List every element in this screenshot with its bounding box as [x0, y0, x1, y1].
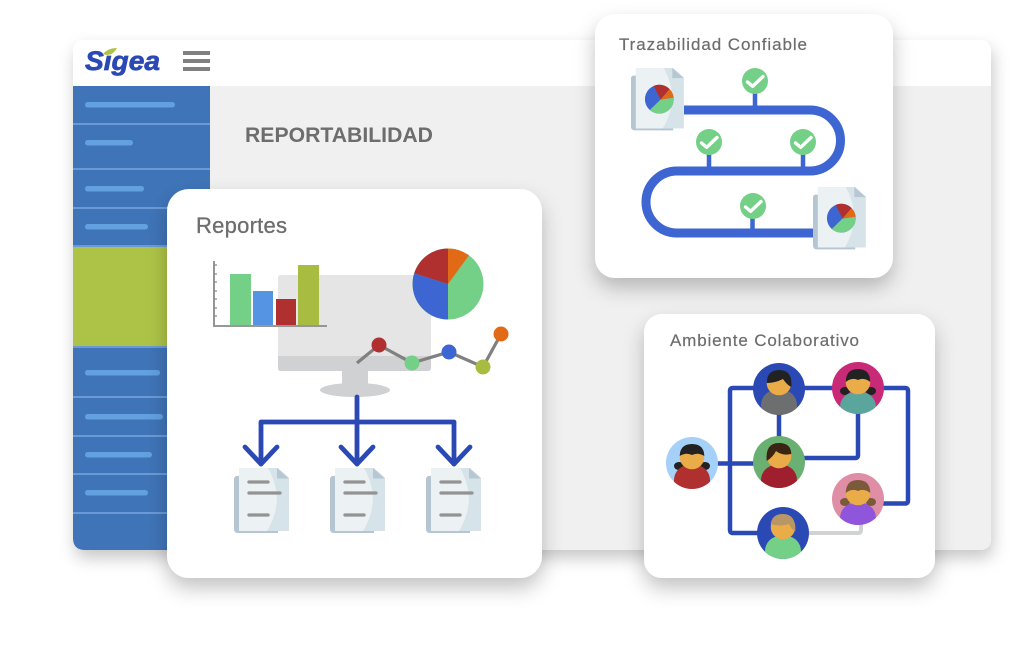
person: bottom [757, 507, 809, 559]
heading: REPORTABILIDAD: REPORTABILIDAD [245, 124, 433, 147]
heading: Ambiente Colaborativo: Ambiente Colaborativo [670, 331, 859, 350]
sidebar [73, 86, 210, 550]
panel: Ambiente Colaborativo [644, 314, 935, 578]
pie chart [412, 248, 484, 320]
network connectors [692, 388, 908, 533]
icon: report document start [631, 68, 684, 130]
icon: report document end [813, 187, 866, 249]
icon: document 3 [426, 468, 481, 533]
icon: document 1 [234, 468, 289, 533]
person: top right [832, 362, 884, 414]
panel: Reportes [167, 189, 542, 578]
arrows to documents [245, 397, 470, 464]
icon: hamburger menu [183, 51, 210, 71]
person: lower right [832, 473, 884, 525]
logo: Sigea: Sigea [85, 46, 160, 76]
panel: Trazabilidad Confiable [595, 14, 893, 278]
heading: Trazabilidad Confiable: Trazabilidad Confiable [619, 35, 807, 54]
icon: check 1 [742, 68, 768, 94]
bar chart [214, 261, 327, 326]
winding path [646, 110, 840, 233]
icon: document 2 [330, 468, 385, 533]
content background [210, 86, 991, 550]
person: left [666, 437, 718, 489]
gray connector [783, 499, 861, 533]
icon: check 4 [740, 193, 766, 219]
heading: Reportes: Reportes [196, 213, 287, 238]
panel: dashboard window [73, 40, 991, 550]
line chart [357, 326, 508, 374]
icon: check 2 [696, 129, 722, 155]
person: centre [753, 436, 805, 488]
icon: monitor [278, 275, 431, 397]
stems [709, 94, 803, 231]
icon: check 3 [790, 129, 816, 155]
person: top centre [753, 363, 805, 415]
